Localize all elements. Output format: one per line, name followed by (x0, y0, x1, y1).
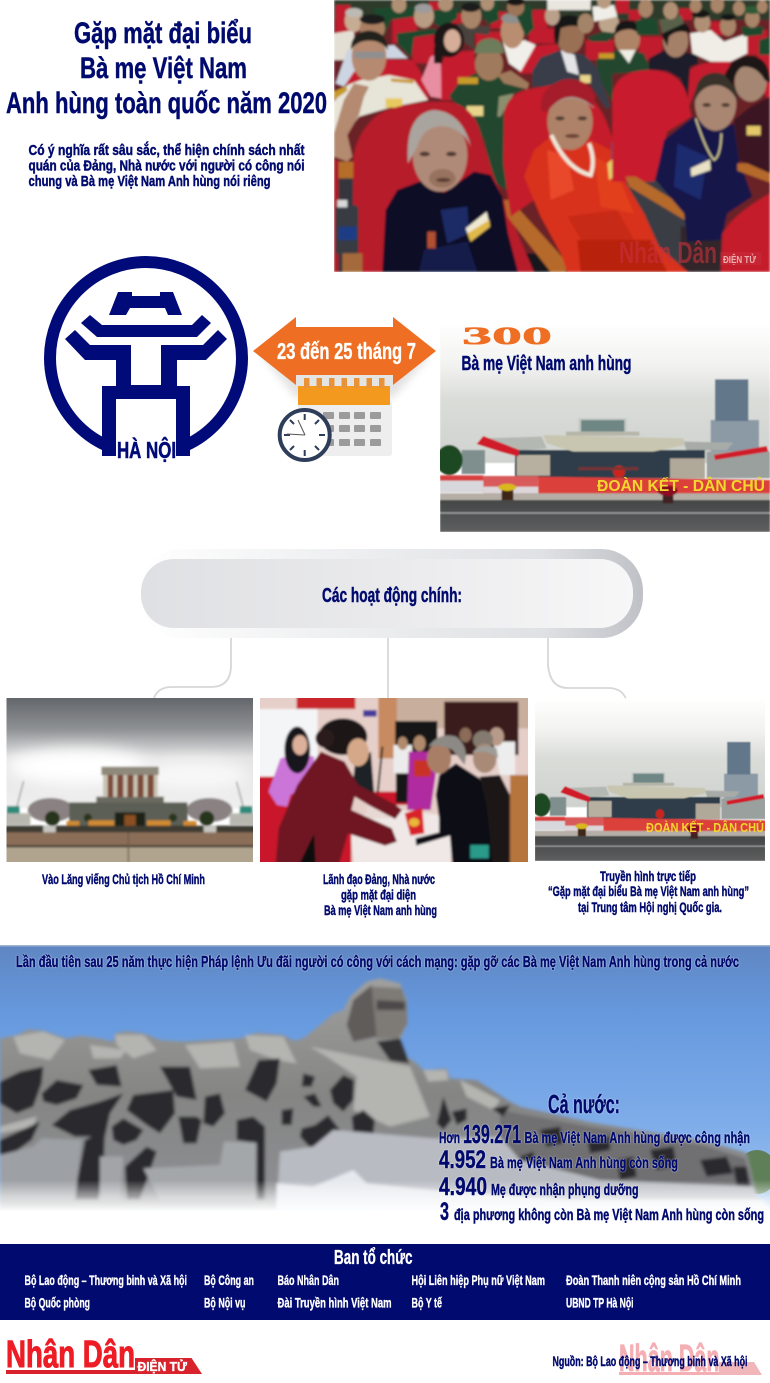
organiser list (24, 1272, 741, 1310)
organiser list: Bộ Nội vụ (204, 1294, 246, 1310)
chair two (503, 82, 627, 217)
icon: calendar and clock (280, 375, 393, 460)
title: Gặp mặt đại biểu (74, 17, 252, 50)
man behind white uniform (336, 45, 408, 87)
icon: Hà Nội logo (50, 262, 242, 463)
caption: leaders meeting: Lãnh đạo Đảng, Nhà nước (323, 871, 435, 887)
intro text block: quán của Đảng, Nhà nước với người có công nói (28, 158, 304, 174)
woman in pink (421, 53, 441, 98)
back row seats (336, 0, 767, 63)
stat: 139.271 recognised (439, 1119, 750, 1149)
dark recesses (0, 1058, 750, 1200)
photo: heroic mothers monument (0, 945, 770, 1225)
organiser list: Hội Liên hiệp Phụ nữ Việt Nam (412, 1272, 545, 1288)
logo: Nhân Dân Điện Tử: ĐIỆN TỬ (138, 1359, 188, 1374)
photo watermark (620, 240, 762, 265)
leader in maroon (275, 752, 402, 868)
standing people (394, 745, 412, 773)
photo: Ho Chi Minh Mausoleum (6, 698, 253, 862)
chair three (612, 70, 691, 182)
organiser list: Đài Truyền hình Việt Nam (278, 1294, 392, 1310)
icon: Hà Nội logo: HÀ NỘI (117, 436, 176, 463)
organiser list: UBND TP Hà Nội (566, 1294, 634, 1310)
logo: Nhân Dân Điện Tử: Nhân Dân (6, 1334, 135, 1376)
heading pill: main activities (140, 549, 643, 638)
photo: leaders meeting the heroic mothers (257, 695, 530, 868)
woman four (734, 97, 770, 173)
heading pill: main activities: Các hoạt động chính: (322, 585, 462, 607)
men behind (493, 742, 515, 775)
photo: heroic mothers seated in red chairs (334, 0, 770, 272)
old woman in black (414, 762, 495, 862)
woman in purple (269, 753, 314, 807)
stat: 4.952 living: Bà mẹ Việt Nam Anh hùng còn sống (490, 1155, 678, 1172)
heading: nationwide: Cả nước: (548, 1089, 620, 1119)
caption: leaders meeting (323, 871, 437, 918)
caption: live broadcast: Truyền hình trực tiếp (600, 868, 696, 884)
title: Bà mẹ Việt Nam (80, 52, 247, 85)
stat: 4.940 cared for (439, 1173, 638, 1201)
table (351, 810, 453, 868)
chair four (721, 193, 770, 272)
stat: 3 localities (440, 1198, 764, 1226)
photo watermark: Nhân Dân (619, 235, 717, 270)
title: Anh hùng toàn quốc năm 2020 (6, 87, 327, 120)
pale lower stone (277, 1130, 763, 1210)
stat: 139.271 recognised: Hơn (439, 1130, 460, 1147)
green officer (596, 48, 651, 103)
heading: organisers: Ban tổ chức (334, 1247, 412, 1269)
organiser list: Bộ Quốc phòng (24, 1294, 90, 1310)
caption: mausoleum visit: Vào Lăng viếng Chủ tịch Hồ Chí Minh (42, 871, 205, 887)
stat: 139.271 recognised: 139.271 (463, 1119, 521, 1149)
organiser list: Bộ Y tế (412, 1294, 442, 1310)
stat: 4.952 living: 4.952 (439, 1146, 486, 1174)
stat: 300 heroic mothers: 300 (462, 323, 552, 350)
stat: 4.952 living (439, 1146, 678, 1174)
photo: National Convention Centre: ĐOÀN KẾT - DÂN CHỦ (597, 476, 765, 495)
intro text block: chung và Bà mẹ Việt Nam Anh hùng nói riêng (28, 173, 270, 190)
photo: National Convention Centre (440, 346, 770, 532)
arrow: date range (253, 317, 436, 398)
man in green with cap (449, 73, 529, 190)
chair one (352, 102, 534, 272)
arrow: date range: 23 đến 25 tháng 7 (277, 338, 416, 364)
woman three (656, 117, 752, 242)
panel: organising committee (0, 1244, 770, 1320)
armrest three (737, 163, 770, 183)
red gift (405, 808, 424, 836)
caption: live broadcast (548, 868, 749, 915)
suit man (532, 50, 611, 108)
stat: 3 localities: 3 (440, 1198, 449, 1226)
armrest two (626, 177, 689, 222)
top right crowd (636, 18, 660, 35)
stat: 300 heroic mothers (462, 323, 632, 375)
photo watermark: ĐIỆN TỬ (723, 253, 756, 266)
stat: 4.940 cared for: 4.940 (439, 1173, 487, 1201)
intro text block: Có ý nghĩa rất sâu sắc, thể hiện chính sách nhất (28, 141, 304, 159)
connector lines (154, 636, 626, 699)
light shelves (0, 1032, 500, 1133)
dark suit man (649, 48, 698, 98)
water bottle (336, 205, 358, 255)
organiser list: Bộ Công an (204, 1272, 254, 1288)
photo: National Convention Centre, small (532, 698, 766, 861)
caption: leaders meeting: Bà mẹ Việt Nam anh hùng (324, 902, 437, 918)
organiser list: Bộ Lao động – Thương binh và Xã hội (24, 1272, 187, 1288)
woman one body (382, 172, 518, 272)
man in white uniform (334, 75, 428, 137)
title (6, 17, 327, 120)
back row people (334, 30, 354, 60)
caption: leaders meeting: gặp mặt đại diện (341, 886, 416, 902)
armrest one (504, 200, 568, 272)
nationwide statistics (439, 1089, 764, 1226)
organiser list: Báo Nhân Dân (278, 1272, 339, 1288)
stat: 4.940 cared for: Mẹ được nhận phụng dưỡng (491, 1182, 638, 1199)
front left armrest (337, 162, 354, 178)
floor gaps (338, 178, 354, 272)
stat: 300 heroic mothers: Bà mẹ Việt Nam anh hùng (462, 353, 632, 375)
face and hair (347, 985, 377, 1042)
textured stone walls (0, 1138, 82, 1200)
intro text block (28, 141, 304, 190)
woman two red dress (524, 137, 688, 272)
